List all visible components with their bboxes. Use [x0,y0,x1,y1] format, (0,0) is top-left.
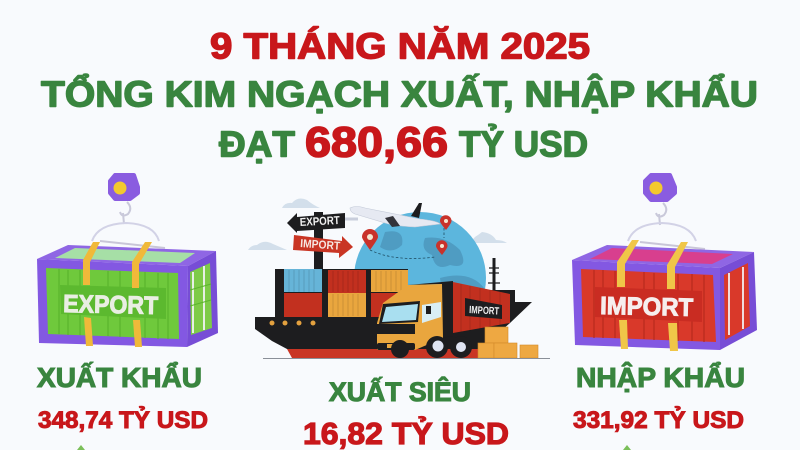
globe [354,212,486,344]
import container [572,175,757,351]
center illustration: ship, truck and globe [248,199,550,358]
ship [255,258,532,358]
icon: crane hook block [92,175,165,248]
truck [377,281,510,358]
value: import: 331,92 TỶ USD [573,405,744,434]
value: export: 348,74 TỶ USD [38,405,208,434]
icon: crane hook block [628,175,705,249]
signpost [287,212,353,270]
icon: green marker left [77,445,85,450]
heading: xuất khẩu: XUẤT KHẨU [37,362,202,393]
cargo boxes [478,327,538,358]
map pins and route [362,215,452,258]
label: import: IMPORT [600,292,693,322]
signpost: EXPORT [300,215,340,229]
airplane [345,203,440,227]
clouds [248,199,507,250]
title [41,26,758,166]
icon: green marker right [623,445,631,450]
title line 3: TỶ USD [459,124,588,164]
title line 3 [219,118,588,166]
truck label: IMPORT [469,304,500,318]
title line 1: 9 THÁNG NĂM 2025 [210,26,590,66]
signpost: IMPORT [300,238,341,253]
title line 3: 680,66 [305,118,448,166]
export container [37,175,218,347]
title line 2: TỔNG KIM NGẠCH XUẤT, NHẬP KHẨU [41,72,758,114]
heading: nhập khẩu: NHẬP KHẨU [576,362,745,393]
heading: xuất siêu: XUẤT SIÊU [329,376,471,407]
label: export: EXPORT [63,290,158,320]
value: trade surplus: 16,82 TỶ USD [303,416,509,450]
title line 3: ĐẠT [219,124,295,164]
